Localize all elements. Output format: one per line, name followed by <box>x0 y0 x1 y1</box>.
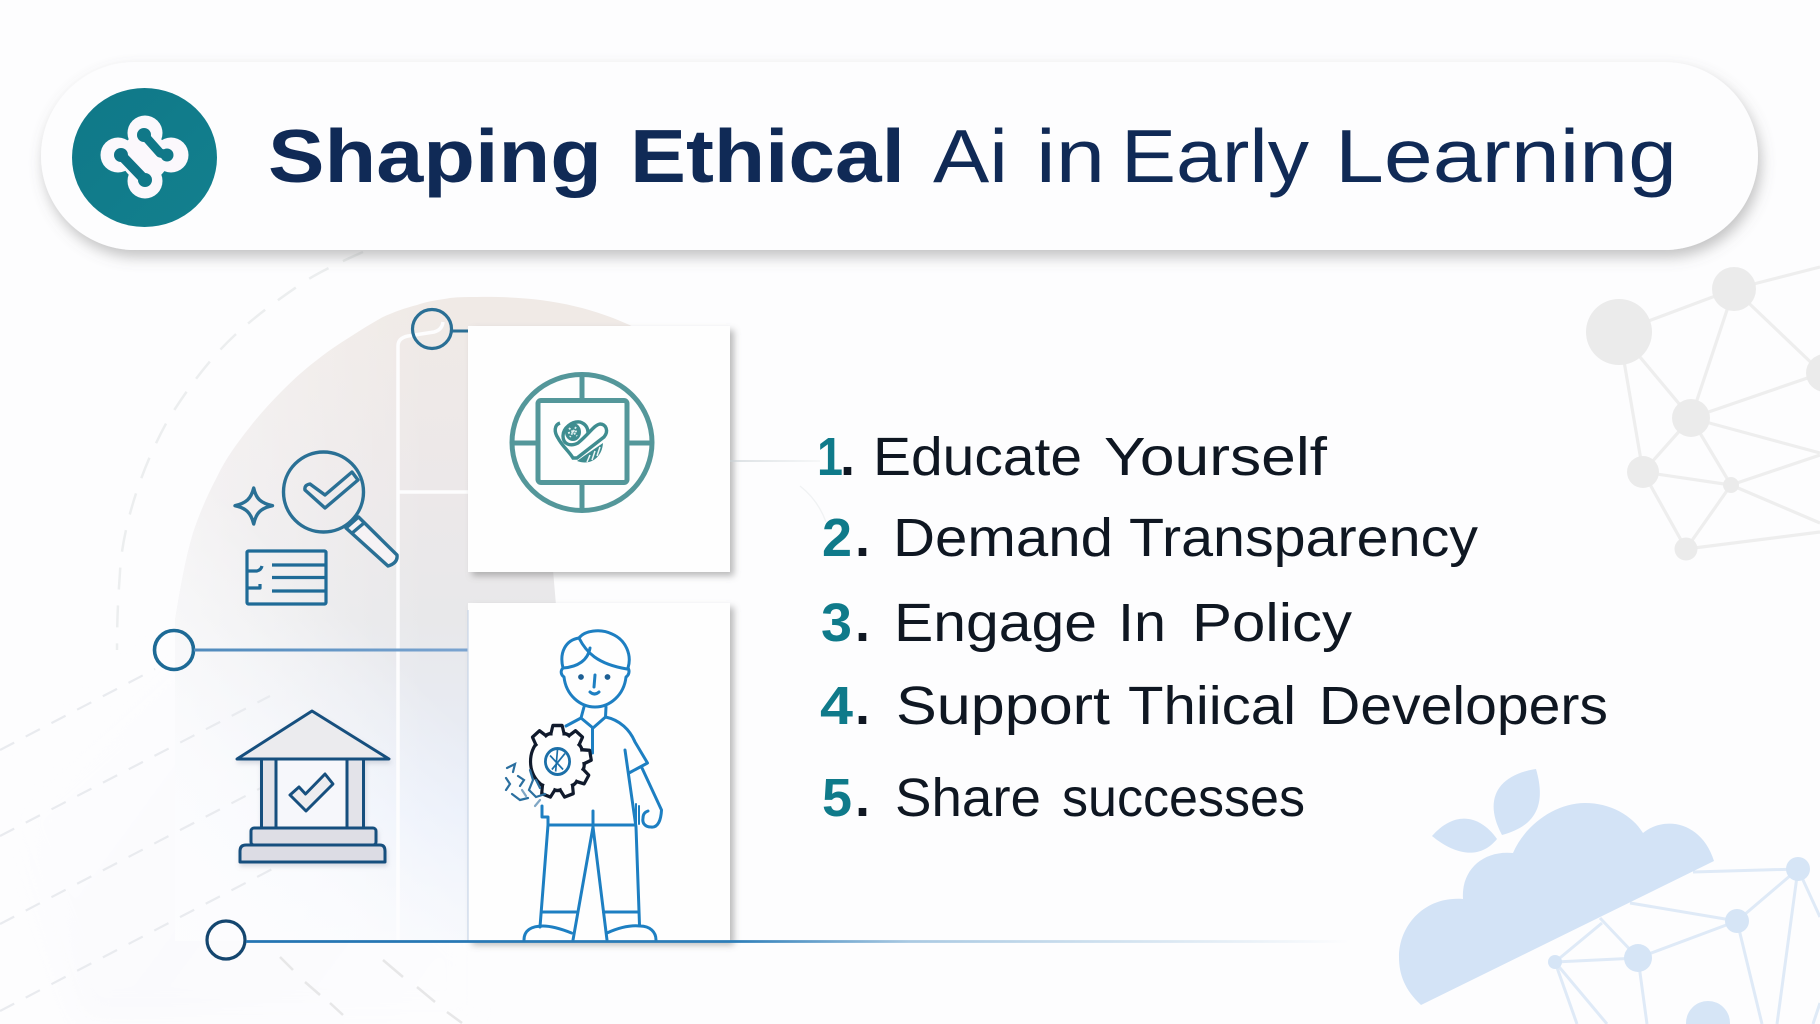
list: item 5: Share <box>895 768 1041 828</box>
title: Ai <box>933 114 1008 198</box>
list: item 3: 3 <box>821 593 852 653</box>
list: item 1 <box>817 427 1328 487</box>
icon: sparkle <box>235 488 272 524</box>
illustration: person with gear <box>524 631 662 940</box>
icon: gear scatter fragments <box>506 764 545 806</box>
connector node: floor <box>207 921 1350 959</box>
network graphic: bottom right <box>1548 857 1820 1024</box>
list: item 1: 1 <box>817 427 843 487</box>
title: Learning <box>1335 114 1677 198</box>
background pale diamond <box>0 640 480 1024</box>
network graphic: top right <box>1586 267 1820 560</box>
icon: logo <box>72 88 217 227</box>
connector: card to list <box>730 461 826 522</box>
header pill <box>41 62 1758 250</box>
list: item 5: 5 <box>822 768 852 828</box>
white connector lines <box>398 322 470 941</box>
title: in <box>1036 114 1105 198</box>
card: top icon panel <box>468 326 730 572</box>
background dashed arc <box>117 252 363 650</box>
list: item 4: 4 <box>820 676 853 736</box>
list: item 3: Engage <box>894 593 1097 653</box>
title: Early <box>1121 114 1310 198</box>
list: item 2 <box>822 508 1478 568</box>
list: item 2: 2 <box>822 508 852 568</box>
list: item 4 <box>820 676 1608 736</box>
background diagonal dashed lines <box>0 669 280 1011</box>
list: item 5: . <box>855 768 870 828</box>
list: item 4: Developers <box>1319 676 1608 736</box>
title: Shaping <box>268 114 602 198</box>
list: item 4: Thiical <box>1128 676 1296 736</box>
list: item 4: Support <box>896 676 1110 736</box>
list: item 4: . <box>855 676 870 736</box>
list: item 1: Yourself <box>1104 427 1328 487</box>
list: item 5: successes <box>1062 768 1305 828</box>
large background shape <box>183 297 631 908</box>
list: item 3: In <box>1118 593 1166 653</box>
list: item 5 <box>822 768 1305 828</box>
card: person panel <box>468 603 730 941</box>
list: item 3 <box>821 593 1352 653</box>
title: Ethical <box>630 114 905 198</box>
list: item 1: Educate <box>873 427 1082 487</box>
background down-right dashes <box>280 957 462 1023</box>
list: item 3: . <box>855 593 870 653</box>
list: item 3: Policy <box>1192 593 1352 653</box>
icon: checklist document <box>247 551 326 604</box>
icon: cloud with leaves <box>1399 769 1714 1005</box>
title <box>268 114 1677 198</box>
connector node: top <box>412 310 470 348</box>
icon: gear <box>531 726 592 798</box>
connector node: middle <box>154 630 470 670</box>
list: item 2: Demand <box>893 508 1113 568</box>
icon: institution building with check <box>237 711 389 862</box>
list: item 1: . <box>840 427 855 487</box>
list: item 2: . <box>855 508 870 568</box>
icon: magnifier with check <box>284 452 397 566</box>
icon: circle frame with heart <box>512 373 652 511</box>
list: item 2: Transparency <box>1129 508 1478 568</box>
